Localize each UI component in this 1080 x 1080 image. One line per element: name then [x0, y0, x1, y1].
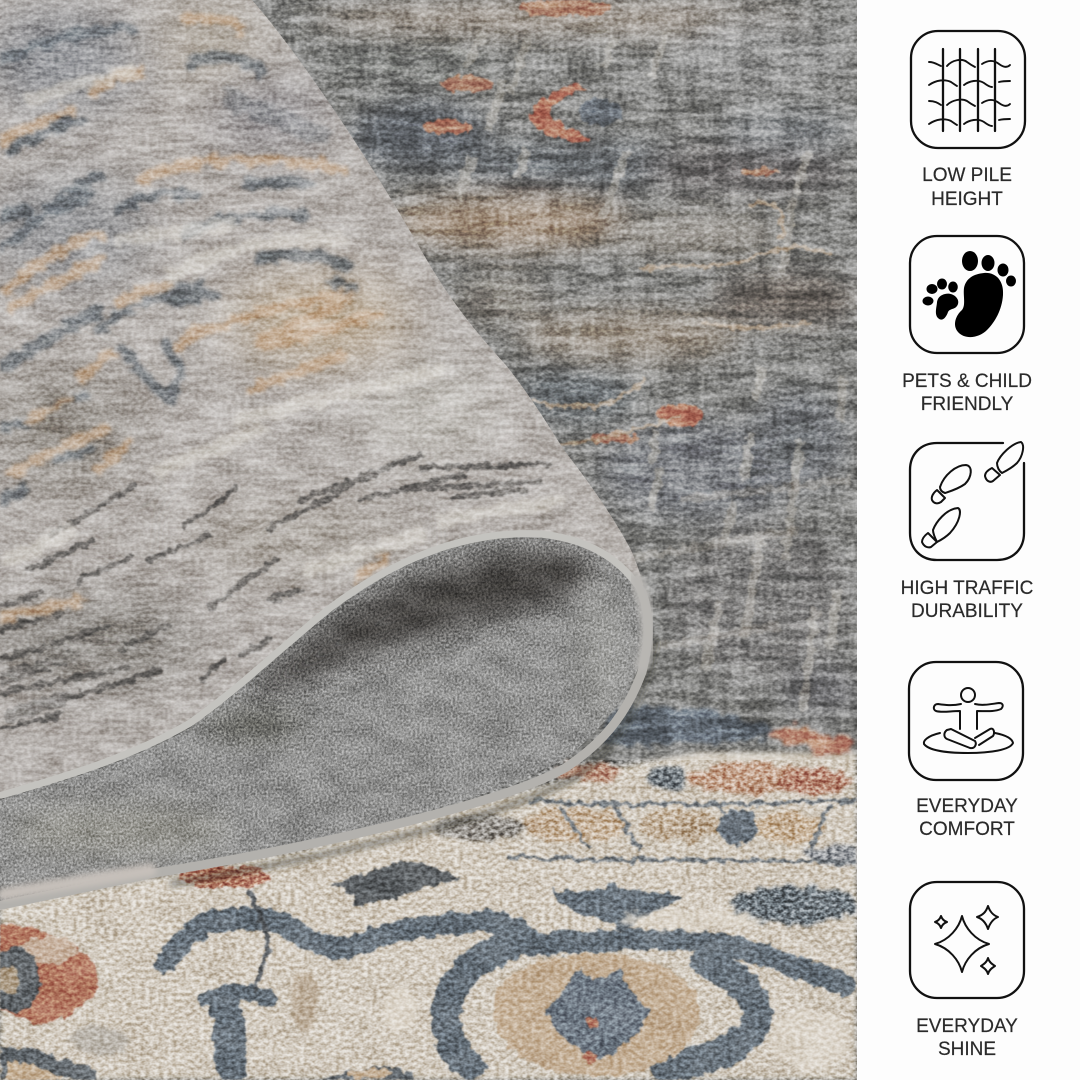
band star	[718, 810, 758, 844]
feature label: EVERYDAY	[916, 796, 1018, 816]
floor dark band above border	[600, 706, 790, 745]
band lines	[508, 800, 857, 862]
panel: pets and child friendly	[902, 234, 1032, 415]
feature label: SHINE	[938, 1039, 996, 1060]
feature label: HEIGHT	[931, 188, 1003, 210]
top face streaks: dark	[0, 455, 547, 730]
dark upper motif	[330, 862, 460, 905]
panel: low pile height	[910, 30, 1026, 210]
feature label: LOW PILE	[922, 165, 1012, 186]
floor weave lines	[458, 30, 850, 710]
floor woven texture	[0, 0, 857, 760]
panel: high traffic durability	[901, 441, 1033, 622]
feature label	[922, 165, 1012, 210]
feature label	[916, 796, 1018, 840]
panel: everyday shine	[908, 880, 1026, 1060]
icon: seated meditation figure	[908, 660, 1024, 782]
roll shadow	[170, 640, 655, 884]
panel: everyday comfort	[908, 660, 1024, 840]
top face streaks: blue-grey arcs	[0, 28, 350, 500]
orange motifs on floor	[179, 0, 780, 888]
feature label: PETS & CHILD	[902, 370, 1032, 392]
feature label: FRIENDLY	[921, 394, 1013, 415]
feature label: HIGH TRAFFIC	[901, 578, 1033, 598]
dark hollow of the roll	[250, 550, 593, 696]
left orange motif	[0, 923, 415, 1080]
bottom rug pattern	[0, 760, 857, 1080]
top face texture	[0, 0, 660, 800]
icon: sparkles	[908, 880, 1026, 1000]
top face streaks: tan	[0, 17, 385, 618]
photo: rolled rug corner	[0, 0, 857, 1080]
feature label: EVERYDAY	[916, 1016, 1018, 1036]
blue ribbons	[165, 890, 845, 1066]
field mottling	[70, 910, 850, 1070]
feature label	[901, 578, 1033, 622]
rug underside	[0, 538, 643, 901]
rug binding edge	[2, 534, 648, 905]
blue star motif	[552, 883, 683, 932]
top face streaks: pale	[10, 70, 560, 570]
icon: footsteps	[908, 441, 1026, 562]
border band patches	[434, 726, 865, 924]
bottom texture	[0, 760, 857, 1080]
underside weave	[0, 538, 643, 901]
icon: paw and footprint	[908, 234, 1026, 354]
lower cream field	[0, 752, 857, 1080]
floor tonal regions	[310, 2, 860, 714]
feature label	[902, 370, 1032, 415]
top face tonal blobs	[0, 6, 500, 680]
icon: pile fibres	[910, 30, 1026, 150]
floor tan veins	[530, 202, 830, 445]
feature label: COMFORT	[919, 819, 1015, 840]
medallion	[492, 953, 700, 1076]
rolled rug top face	[0, 0, 660, 800]
feature label	[916, 1016, 1018, 1060]
feature label: DURABILITY	[911, 601, 1023, 622]
